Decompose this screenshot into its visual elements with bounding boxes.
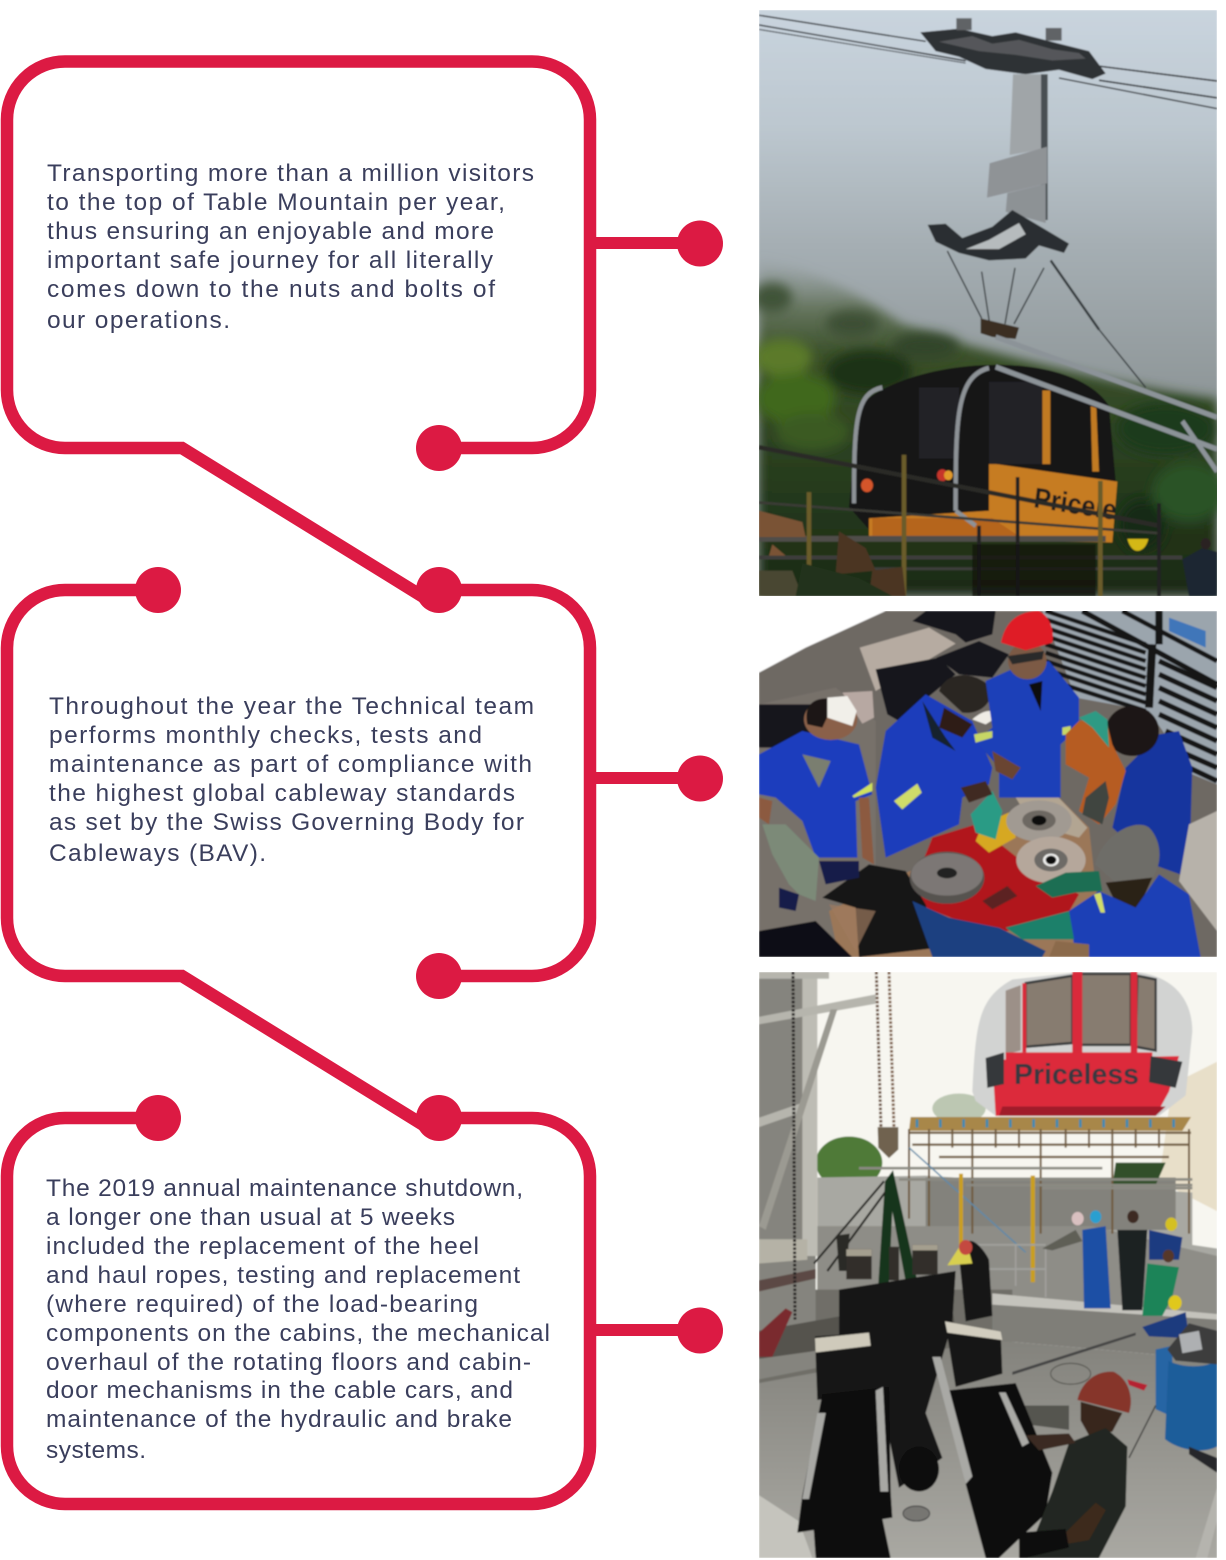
- dot: callout 1 connector end: [677, 220, 723, 266]
- photo 3: bogie lifted by chain with red cabin behind: [759, 972, 1217, 1558]
- text: callout 1: comes down to the nuts and bolts of: [47, 276, 495, 303]
- workers background: [1082, 1226, 1111, 1308]
- bushes and wall: [816, 1136, 882, 1189]
- photo 1: cable car on cable in fog: Pricele: [1032, 482, 1118, 526]
- text: callout 2: Throughout the year the Technical team: [49, 693, 534, 720]
- man right: [1112, 731, 1192, 878]
- text: callout 2: as set by the Swiss Governing Body for: [49, 809, 524, 836]
- outline: callout 3 bubble: [7, 1118, 590, 1504]
- panel: callout 3: [7, 1095, 723, 1504]
- chains: [793, 972, 894, 1320]
- text: callout 3: overhaul of the rotating floors and cabin-: [46, 1349, 531, 1376]
- dot: callout 3 top left: [135, 1095, 181, 1141]
- text: callout 3: (where required) of the load-bearing: [46, 1291, 478, 1318]
- dot: callout 2 top right: [416, 567, 462, 613]
- worker front: [959, 1241, 992, 1321]
- scaffold top: [909, 1117, 1191, 1131]
- cabin: [849, 365, 1116, 533]
- text: callout 2: [49, 693, 534, 867]
- text: callout 1: our operations.: [47, 307, 230, 334]
- text: callout 3: included the replacement of the heel: [46, 1233, 479, 1260]
- text: callout 1: [47, 160, 534, 334]
- wheels: [1006, 800, 1072, 842]
- text: callout 3: a longer one than usual at 5 weeks: [46, 1204, 455, 1231]
- dot: callout 3 connector end: [677, 1308, 723, 1354]
- panel: callout 1: [7, 62, 723, 598]
- ledge and floor: [992, 1293, 1217, 1355]
- connector: callout 1 to photo 1: [596, 237, 700, 249]
- man left: [759, 731, 872, 858]
- text: callout 2: performs monthly checks, tests and: [49, 722, 482, 749]
- barrels: [1156, 1346, 1172, 1417]
- man centre: [876, 694, 992, 858]
- text: callout 2: Cableways (BAV).: [49, 840, 266, 867]
- table: [829, 798, 1102, 957]
- dot: callout 3 top right: [416, 1095, 462, 1141]
- text: callout 1: important safe journey for all literally: [47, 247, 494, 274]
- panel: callout 2: [7, 567, 723, 1126]
- bins right: [1179, 811, 1217, 931]
- connector: callout 3 to photo 3: [596, 1324, 700, 1336]
- outline: callout 2 bubble: [7, 590, 590, 1126]
- cabin: [972, 972, 1192, 1116]
- man bottom: [1095, 825, 1159, 886]
- text: callout 1: thus ensuring an enjoyable and more: [47, 218, 494, 245]
- text: callout 3: door mechanisms in the cable cars, and: [46, 1377, 513, 1404]
- photo 1: cable car on cable in fog: [759, 10, 1217, 596]
- machine: [759, 1308, 956, 1359]
- text: callout 3: The 2019 annual maintenance shutdown,: [46, 1175, 523, 1202]
- dot: callout 2 connector end: [677, 756, 723, 802]
- text: callout 1: Transporting more than a million visitors: [47, 160, 534, 187]
- connector: callout 2 to photo 2: [596, 772, 700, 784]
- text: callout 3: components on the cabins, the mechanical: [46, 1320, 550, 1347]
- text: callout 1: to the top of Table Mountain per year,: [47, 189, 505, 216]
- dot: callout 2 top left: [135, 567, 181, 613]
- dot: callout 1 bubble end: [416, 425, 462, 471]
- dot: callout 2 bubble end: [416, 953, 462, 999]
- scaffold: [759, 447, 1182, 596]
- photo 3: bogie lifted by chain with red cabin behind: Priceless: [1014, 1058, 1139, 1090]
- outline: callout 1 bubble: [7, 62, 590, 598]
- man top: [976, 661, 1079, 798]
- text: callout 3: [46, 1175, 550, 1464]
- left wall: [759, 972, 816, 1379]
- text: callout 3: and haul ropes, testing and replacement: [46, 1262, 520, 1289]
- text: callout 2: maintenance as part of compliance with: [49, 751, 532, 778]
- text: callout 3: maintenance of the hydraulic and brake: [46, 1406, 512, 1433]
- text: callout 2: the highest global cableway standards: [49, 780, 515, 807]
- photo 2: technicians inspecting parts: [759, 611, 1217, 957]
- railing: [1042, 611, 1217, 784]
- text: callout 3: systems.: [46, 1437, 146, 1464]
